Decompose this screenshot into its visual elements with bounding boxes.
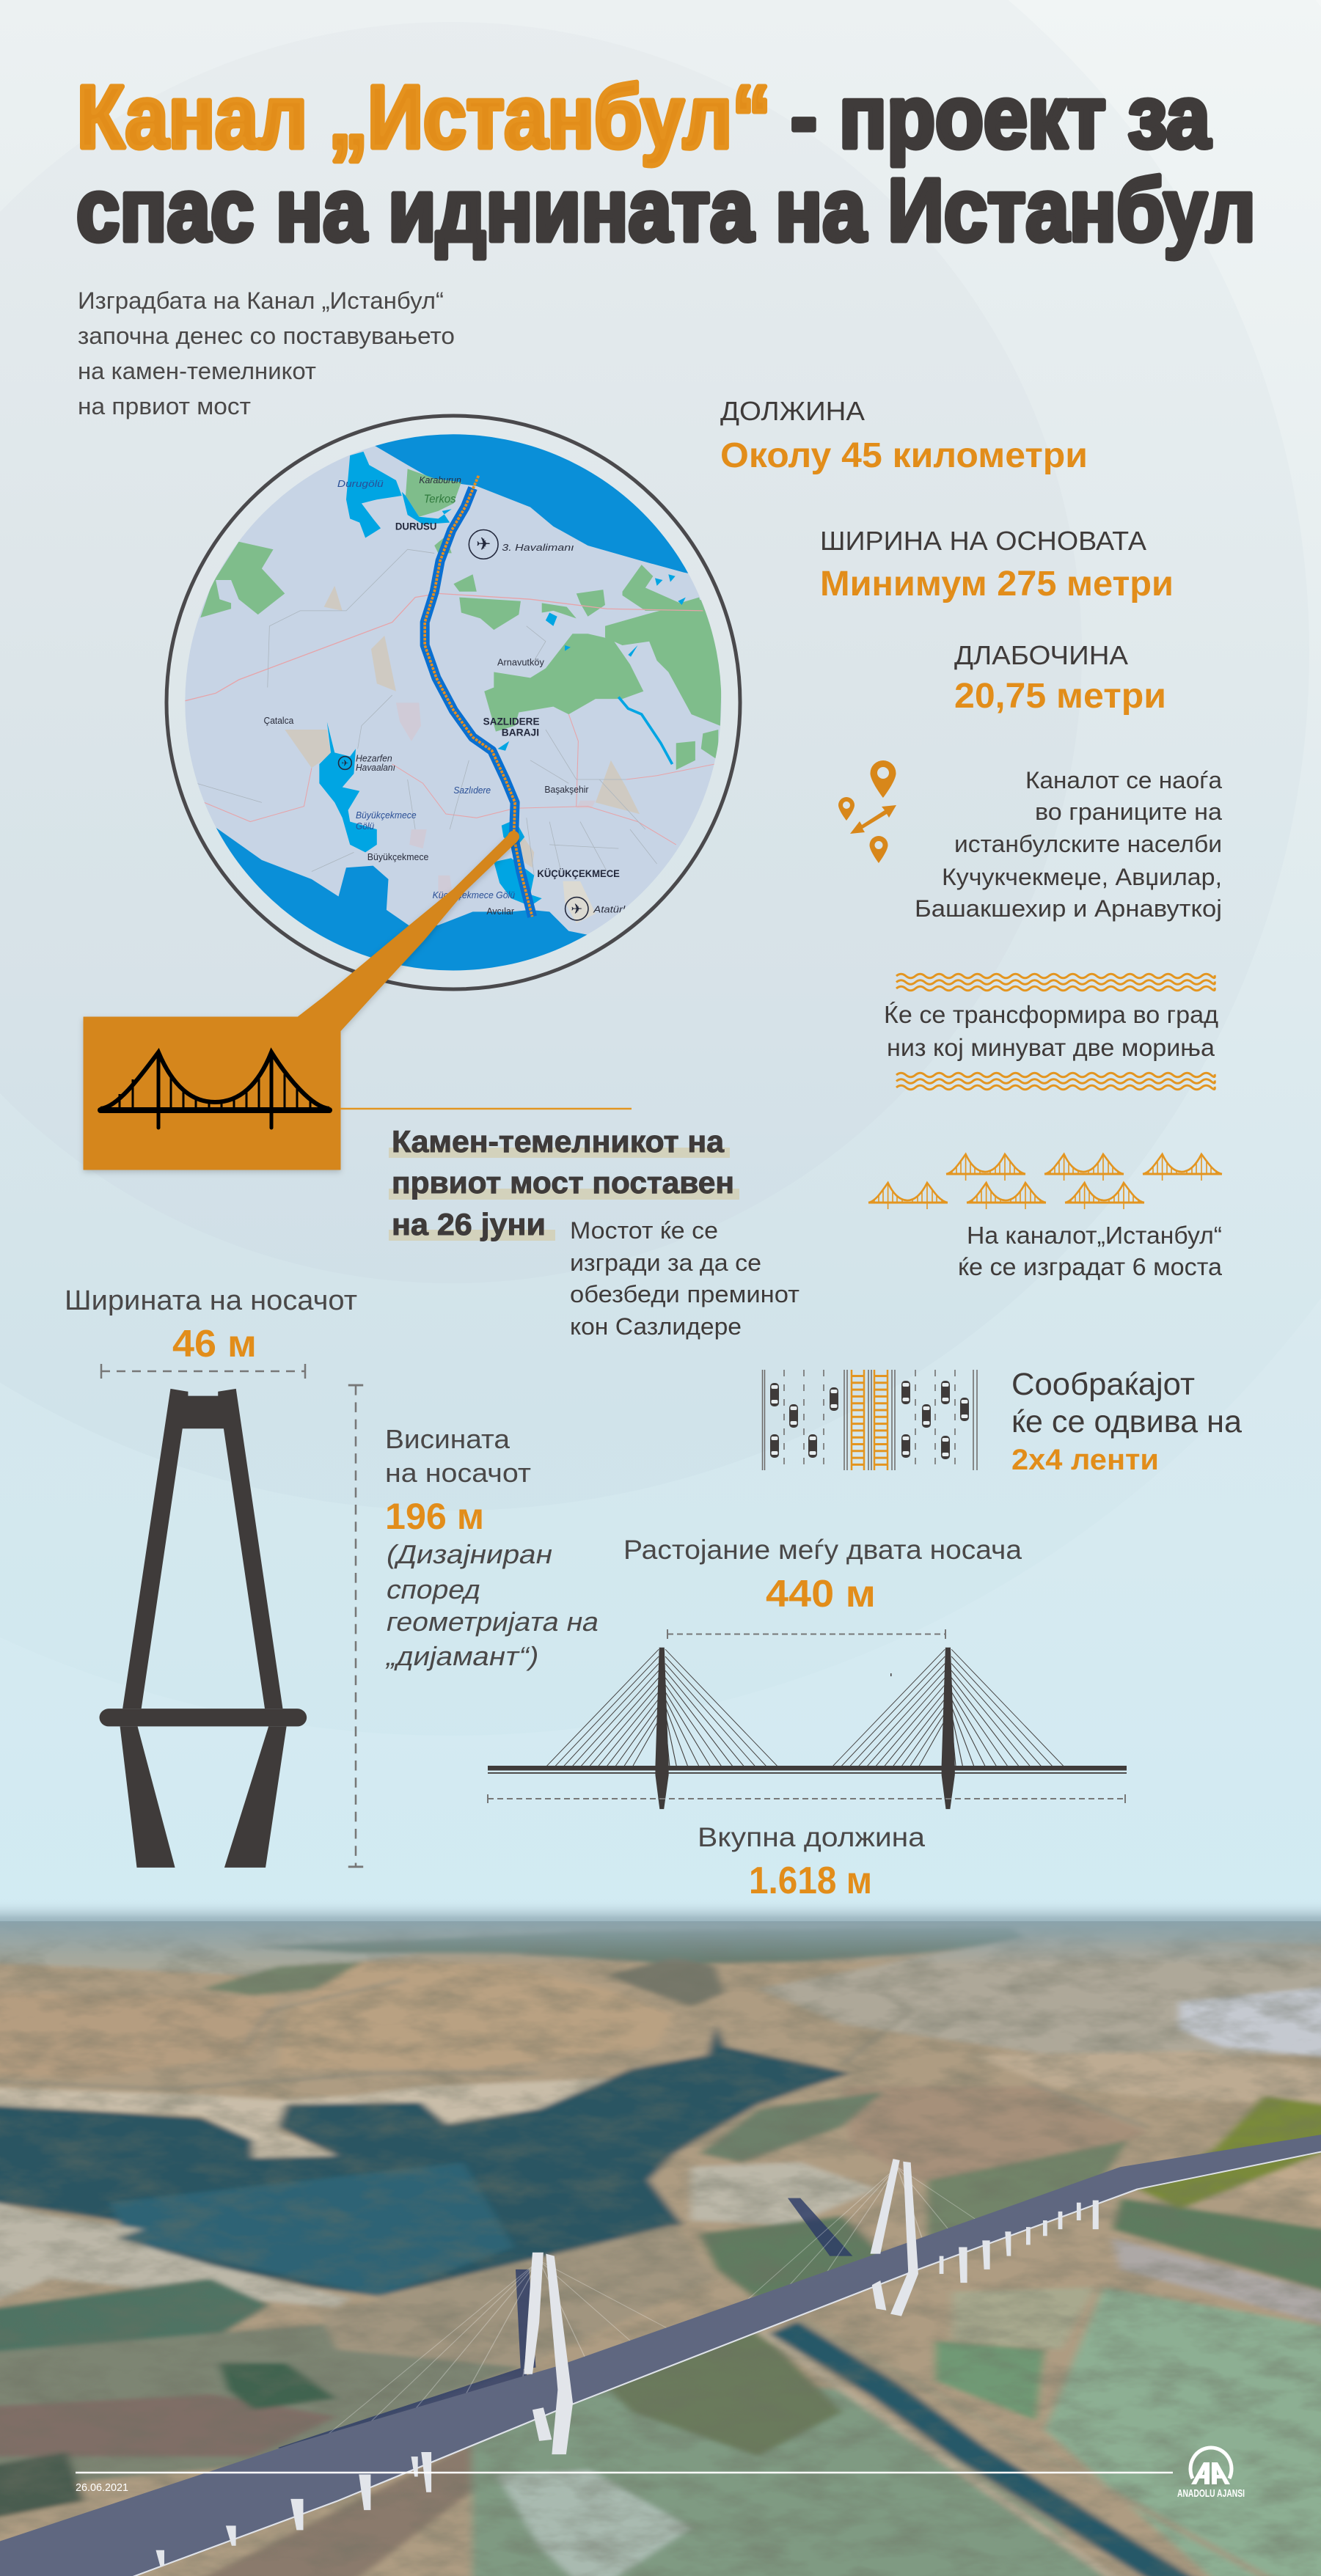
intro text: Изградбата на Канал „Истанбул“ — [78, 287, 444, 314]
photo texture — [0, 1921, 1321, 2576]
text: six bridges: ќе се изградат 6 моста — [958, 1253, 1223, 1280]
text: bridge purpose: кон Сазлидере — [570, 1313, 742, 1340]
stat: base width — [820, 526, 1174, 603]
map labels: Sazlıdere — [453, 785, 491, 796]
airport icons — [339, 530, 588, 920]
map labels: Karaburun — [419, 475, 461, 485]
airport icons: ✈ — [571, 901, 582, 917]
intro text: започна денес со поставувањето — [78, 323, 455, 349]
text: traffic lanes: 2x4 ленти — [1011, 1444, 1159, 1476]
text: districts: истанбулските населби — [954, 831, 1222, 857]
map labels: 3. Havalimanı — [502, 543, 574, 553]
stat: depth: 20,75 метри — [954, 677, 1166, 716]
map labels: Atatürk — [593, 904, 629, 914]
stat: length: ДОЛЖИНА — [720, 396, 865, 426]
text: two seas: Ќе се трансформира во град — [884, 1001, 1218, 1028]
label: total length: 1.618 м — [749, 1860, 872, 1902]
map — [147, 396, 740, 997]
text: pylon height: (Дизајниран — [384, 1539, 556, 1569]
text: traffic lanes: Сообраќајот — [1011, 1367, 1195, 1402]
map labels: Durugölü — [337, 479, 384, 489]
text: pylon height: „дијамант“) — [384, 1641, 542, 1671]
label: total length — [488, 1794, 1125, 1902]
text: bridge purpose: Мостот ќе се — [570, 1217, 718, 1244]
map labels: DURUSU — [395, 521, 436, 532]
map labels — [264, 475, 629, 917]
text: bridge purpose: обезбеди преминот — [570, 1281, 799, 1307]
title — [76, 67, 1256, 260]
icon: waves top — [896, 974, 1215, 991]
map labels: Avcılar — [486, 906, 514, 917]
map labels: Küçükçekmece Gölü — [433, 890, 515, 900]
text: six bridges: На каналот„Истанбул“ — [967, 1222, 1222, 1249]
stat: base width: Минимум 275 метри — [820, 565, 1174, 603]
stat: length — [720, 396, 1088, 475]
icon: waves bottom — [896, 1073, 1215, 1090]
icon: location pins — [838, 760, 896, 863]
logo: Anadolu Ajansi — [1177, 2448, 1245, 2500]
text: pylon height: на носачот — [385, 1458, 531, 1488]
intro text: на камен-темелникот — [78, 358, 316, 384]
stat: length: Околу 45 километри — [720, 436, 1088, 475]
callout box with pointer — [84, 831, 519, 1170]
text: pylon height: геометријата на — [384, 1607, 603, 1637]
footer line — [76, 2472, 1173, 2473]
text: two seas: низ кој минуват две морињa — [887, 1034, 1215, 1061]
background with concentric circles — [0, 0, 1321, 1951]
map labels: KÜÇÜKÇEKMECE — [537, 867, 620, 879]
text: bridge purpose: изгради за да се — [570, 1250, 761, 1276]
intro text: на првиот мост — [78, 393, 251, 419]
label: pylon width — [65, 1285, 357, 1379]
text: six bridges — [958, 1222, 1223, 1280]
text: pylon height: 196 м — [385, 1496, 484, 1537]
airport icons: ✈ — [476, 535, 491, 554]
bridge elevation — [488, 1648, 1127, 1809]
text: districts: Кучукчекмеџе, Авџилар, — [942, 864, 1222, 890]
text: pylon height: според — [384, 1574, 484, 1604]
aerial photo of bridge and lake — [0, 1899, 1321, 2576]
map labels: Havaalanı — [356, 763, 395, 773]
label: pylon width: 46 м — [172, 1323, 257, 1365]
map labels: Büyükçekmece — [356, 810, 417, 821]
haze over horizon — [0, 1921, 1321, 1959]
heading: foundation stone: Камен-темелникот на — [392, 1124, 725, 1159]
pylon drawing — [100, 1385, 363, 1868]
map labels: SAZLIDERE — [483, 716, 540, 727]
label: total length: Вкупна должина — [698, 1822, 925, 1852]
map labels: Büyükçekmece — [367, 852, 428, 862]
label: distance between pylons: 440 м — [766, 1573, 876, 1615]
icon: suspension bridge — [100, 1052, 329, 1128]
heading: foundation stone: на 26 јуни — [392, 1207, 546, 1241]
text: two seas — [884, 1001, 1218, 1061]
logo: Anadolu Ajansi: ANADOLU AJANSI — [1177, 2487, 1245, 2500]
date: 26.06.2021 — [76, 2481, 128, 2494]
text: districts — [915, 767, 1222, 922]
title: Канал „Истанбул“ — [77, 67, 771, 166]
stat: depth — [954, 640, 1166, 716]
label: pylon width: Ширината на носачот — [65, 1285, 357, 1316]
cables and deck — [0, 2129, 1321, 2576]
map labels: BARAJI — [502, 726, 539, 738]
text: pylon height — [384, 1424, 603, 1671]
map labels: Başakşehir — [544, 785, 588, 795]
airport icons: ✈ — [342, 760, 349, 768]
text: districts: во границите на — [1035, 799, 1222, 825]
text: pylon height: Висината — [385, 1424, 511, 1454]
icon: road with lanes — [763, 1370, 977, 1470]
stat: depth: ДЛАБОЧИНА — [954, 640, 1128, 670]
connector line — [340, 1108, 632, 1109]
text: traffic lanes: ќе се одвива на — [1011, 1404, 1242, 1439]
heading: foundation stone: првиот мост поставен — [392, 1165, 734, 1200]
text: districts: Каналот се наоѓа — [1025, 767, 1222, 793]
map labels: Hezarfen — [356, 753, 392, 763]
map labels: Çatalca — [264, 716, 293, 726]
intro text — [78, 287, 455, 419]
text: traffic lanes — [1011, 1367, 1242, 1476]
stat: base width: ШИРИНА НА ОСНОВАТА — [820, 526, 1146, 556]
map labels: Arnavutköy — [497, 658, 545, 668]
label: distance between pylons — [623, 1535, 1022, 1639]
map labels: Gölü — [356, 821, 374, 832]
label: distance between pylons: Растојание меѓу двата носача — [623, 1535, 1022, 1565]
text: districts: Башакшехир и Арнавуткој — [915, 895, 1222, 922]
map labels: Terkos — [424, 493, 456, 505]
title: - проект за — [791, 67, 1212, 166]
heading: foundation stone — [389, 1124, 739, 1241]
text: bridge purpose — [570, 1217, 799, 1340]
canal route — [425, 476, 533, 917]
icons: six bridges — [868, 1154, 1222, 1209]
